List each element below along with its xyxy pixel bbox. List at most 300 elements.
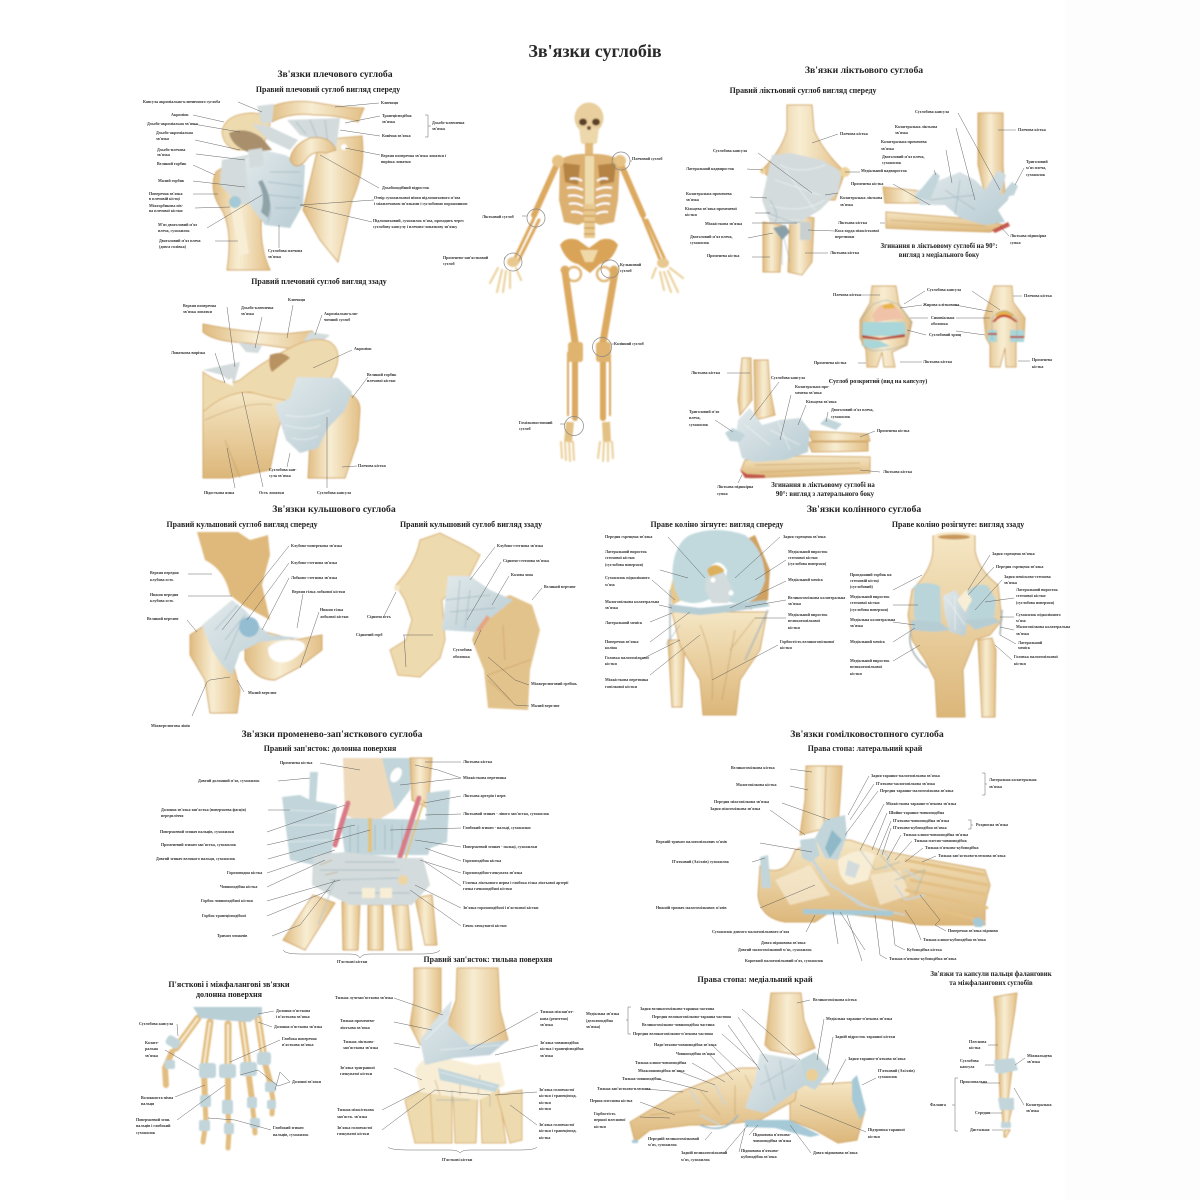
labels and leaders: Тильна лучезап'ясткова зв'язка — [335, 995, 393, 1000]
labels and leaders: клубова ость — [150, 598, 174, 603]
labels and leaders: плечової кістки — [367, 378, 396, 383]
labels and leaders: Задня міжгомілкова зв'язка — [710, 806, 760, 811]
labels and leaders — [156, 759, 569, 964]
labels and leaders: Дзьобо-плечова — [157, 147, 185, 152]
labels and leaders: кістки — [780, 645, 792, 650]
labels and leaders — [814, 287, 1052, 369]
heading: hip joint: Зв'язки кульшового суглоба — [272, 504, 396, 515]
labels and leaders: Колова зона — [511, 572, 533, 577]
labels and leaders: Тильна клино-човноподібна — [635, 1060, 686, 1065]
labels and leaders: (суглобовий) — [850, 584, 874, 589]
labels and leaders: великогомілкової — [788, 618, 821, 623]
illustration: ankle medial — [630, 993, 866, 1143]
labels and leaders: Проксимальна — [960, 1079, 987, 1084]
labels and leaders: Ліктьова кістка — [838, 220, 867, 225]
labels and leaders: Верхня поперечна — [183, 303, 216, 308]
labels and leaders: Латеральний меніск — [605, 620, 643, 625]
illustration: hip front — [190, 532, 322, 713]
labels and leaders: менева зв'язка — [795, 390, 822, 395]
labels and leaders: м'яз, сухожилок — [681, 1157, 711, 1162]
labels and leaders: Надп'ятково-човноподібна зв'язка — [654, 1042, 716, 1047]
labels and leaders: Медіальний надвиросток — [861, 168, 908, 173]
labels and leaders: Медіальна зв'язка — [586, 1011, 619, 1016]
labels and leaders: Міжкісткова перетинка — [463, 775, 506, 780]
labels and leaders — [143, 99, 467, 259]
labels and leaders: Горохоподібна кістка — [463, 858, 501, 863]
labels and leaders: клубова ость — [150, 577, 174, 582]
labels and leaders: пальця — [141, 1101, 155, 1106]
labels and leaders: Медіальний меніск — [788, 577, 824, 582]
labels and leaders: Двоголовий м'яз плеча, — [831, 407, 874, 412]
labels and leaders: Великогомілкова кістка — [813, 997, 857, 1002]
subheading: knee front: Праве коліно зігнуте: вигляд спереду — [651, 520, 784, 529]
labels and leaders: Зв'язка головчастої — [539, 1087, 575, 1092]
labels: Гомілковостопний — [519, 420, 553, 425]
labels and leaders: Тильна клино-човноподібна зв'язка — [903, 832, 968, 837]
illustration: hip back — [390, 533, 540, 710]
labels and leaders: великогомілкової — [850, 664, 883, 669]
labels and leaders: Зв'язка горохоподібної і п'ясткової кістки — [463, 905, 539, 910]
labels and leaders: кістка — [969, 1045, 980, 1050]
labels and leaders: кістки і трапецієпод. — [539, 1093, 576, 1098]
labels and leaders: Горбистість великогомілкової — [780, 639, 835, 644]
labels and leaders: Ость лопатки — [259, 490, 285, 495]
labels and leaders: Колате- — [145, 1040, 160, 1045]
labels and leaders: Великий горбик — [367, 372, 397, 377]
skull — [574, 102, 604, 134]
illustration: opened joint — [860, 286, 1025, 367]
panel: ankle ligaments, lateral view — [656, 729, 1037, 963]
labels and leaders: Сухожилок підколінного — [605, 575, 650, 580]
labels and leaders: Передній великогомілковий — [648, 1136, 700, 1141]
labels and leaders: Сідничо-стегнова зв'язка — [503, 558, 549, 563]
labels and leaders — [335, 995, 584, 1162]
labels and leaders: Горбок трапецієподібної — [202, 913, 247, 918]
labels and leaders: кубоподібна зв'язка — [741, 1154, 777, 1159]
labels and leaders: Трапецієподібна — [382, 113, 412, 118]
labels and leaders: Горбок човноподібної кістки — [201, 898, 253, 903]
labels and leaders: м'яза — [605, 582, 615, 587]
labels and leaders: Капсула акроміально-ключичного суглоба — [143, 99, 220, 104]
labels and leaders: Суглобова капсула — [771, 375, 805, 380]
labels and leaders: Роздвоєна зв'язка — [976, 822, 1008, 827]
labels and leaders: Тильна променево- — [340, 1018, 376, 1023]
panel: wrist, dorsal view — [335, 955, 584, 1162]
labels and leaders: Суглобова — [453, 647, 472, 652]
labels and leaders: Суглобова капсула — [139, 1021, 173, 1026]
labels and leaders: Зв'язка головчастої — [337, 1125, 373, 1130]
labels and leaders: Ключиця — [288, 297, 306, 302]
labels and leaders: в плечовій кістці — [149, 196, 181, 201]
labels and leaders: Долонна п'ясткова зв'язка — [274, 1024, 322, 1029]
labels and leaders: Міжвертлюгова лінія — [151, 723, 191, 728]
labels: Колінний суглоб — [614, 341, 644, 346]
labels and leaders: коліна — [605, 645, 617, 650]
labels and leaders: кістка і трапецієподібна — [540, 1046, 584, 1051]
labels and leaders: Великогомілкова кістка — [731, 765, 775, 770]
labels and leaders: сухожилок — [136, 1130, 156, 1135]
labels and leaders — [850, 551, 1070, 676]
labels and leaders — [356, 543, 578, 708]
labels and leaders: Головка малогомілкової — [1014, 654, 1059, 659]
labels and leaders: Акроміально-клю- — [324, 311, 359, 316]
caption: flexed medial line 2: вигляд з медіального боку — [899, 252, 980, 259]
labels and leaders: Колатеральна — [1026, 1102, 1051, 1107]
labels and leaders: Приєднаний горбик на — [850, 572, 891, 577]
labels and leaders — [838, 109, 1048, 245]
labels and leaders: сухожилок — [1026, 172, 1046, 177]
labels and leaders: Ліктьова кістка — [923, 359, 952, 364]
labels and leaders: Долонна зв'язка зап'ястка (поверхнева фасція) — [161, 807, 247, 812]
labels and leaders: Глибока поперечна — [282, 1036, 317, 1041]
labels and leaders: сухожилок — [878, 1074, 898, 1079]
subheading: dorsal surface: Правий зап'ясток: тильна поверхня — [424, 955, 553, 964]
labels and leaders: П'ятково-кубоподібна зв'язка — [893, 825, 947, 830]
labels and leaders: кістки — [788, 625, 800, 630]
labels and leaders — [147, 543, 349, 728]
labels and leaders: м'яз, сухожилок — [648, 1142, 678, 1147]
labels and leaders: П'ятково-човноподібна зв'язка — [893, 818, 949, 823]
labels and leaders: зв'язка — [850, 623, 863, 628]
illustration: knee back — [908, 532, 1002, 717]
labels and leaders: зв'язка — [1004, 580, 1017, 585]
labels and leaders: вирізка лопатки — [381, 159, 411, 164]
labels and leaders: Ліктьовий згинач - лівого зап'ястка, сухожилок — [463, 811, 550, 816]
labels and leaders: Суглобова капсула — [713, 148, 747, 153]
labels and leaders: Дзьобо-акроміальна — [156, 130, 193, 135]
labels and leaders: Довгий долонний м'яз, сухожилок — [198, 778, 260, 783]
legs — [565, 272, 615, 342]
labels and leaders: Колатеральна ліктьова — [895, 124, 937, 129]
labels and leaders: П'ясткові кістки — [442, 1157, 473, 1162]
panel: hand ligaments — [136, 980, 322, 1148]
labels and leaders: Сухожилок підколінного — [1016, 612, 1061, 617]
labels and leaders: плеча, сухожилок — [158, 228, 190, 233]
labels and leaders: Довгий згинач великого пальця, сухожилок — [156, 856, 236, 861]
labels and leaders: Плечова кістка — [833, 292, 861, 297]
bracket — [952, 1078, 958, 1131]
labels and leaders: зв'язка — [382, 119, 395, 124]
labels and leaders: зв'язка — [1016, 631, 1029, 636]
labels: суглоб — [519, 426, 531, 431]
labels and leaders: Короткий малогомілковий м'яз, сухожилок — [745, 958, 824, 963]
metacarpal brace — [388, 1147, 537, 1153]
labels and leaders: Зв'язка головчастої — [539, 1122, 575, 1127]
labels and leaders: стегнової кістки — [850, 600, 880, 605]
labels and leaders: П'ясткові кістки — [337, 959, 368, 964]
panel: shoulder back view — [171, 277, 397, 495]
labels and leaders: капсула — [960, 1064, 974, 1069]
labels and leaders: Поперечна зв'язка підошви — [948, 928, 999, 933]
labels: Ліктьовий суглоб — [482, 214, 514, 219]
illustration: elbow front — [760, 105, 850, 275]
labels and leaders: Отвір сухожилкової піхви підлопаткового м'яза — [374, 195, 460, 200]
heading: elbow joint: Зв'язки ліктьового суглоба — [805, 65, 923, 76]
labels and leaders: і міжплечовою зв'язками і суглобовою порожниною — [374, 201, 467, 206]
labels and leaders: Малий горбик — [158, 178, 185, 183]
labels and leaders: Підтримка таранної — [868, 1127, 906, 1132]
labels and leaders: гачкуватої кістки — [337, 1131, 370, 1136]
labels and leaders: Колатеральна променева — [686, 191, 732, 196]
subheading: elbow front: Правий ліктьовий суглоб вигляд спереду — [730, 86, 876, 95]
labels and leaders — [605, 534, 845, 689]
labels and leaders: кістки — [685, 212, 697, 217]
labels and leaders: гомілкової кістки — [605, 684, 638, 689]
labels and leaders: гачкуватої кістки — [340, 1071, 373, 1076]
subheading: hip back: Правий кульшовий суглоб вигляд ззаду — [400, 520, 542, 529]
labels and leaders: Латеральний — [1018, 640, 1043, 645]
labels and leaders: Міжкісткова зв'язка — [705, 221, 742, 226]
illustration: elbow medial — [883, 113, 1018, 233]
labels and leaders: зв'язка — [540, 1053, 553, 1058]
labels and leaders: Акроміон — [354, 346, 372, 351]
labels and leaders: Ліктьова підшкірна — [1010, 233, 1046, 238]
labels and leaders: першої плеснової — [594, 1117, 626, 1122]
labels and leaders: Тильна човноподібна — [622, 1076, 661, 1081]
labels and leaders: сухожилок — [690, 240, 710, 245]
labels and leaders: пальців, сухожилок — [273, 1132, 309, 1137]
labels: Плечовий суглоб — [632, 156, 663, 161]
panel: knee back view — [850, 520, 1070, 717]
labels and leaders: Медіальна таранно-п'яткова зв'язка — [826, 1016, 892, 1021]
labels and leaders: Суглобовий хрящ — [929, 332, 962, 337]
labels and leaders: Задня менісково-стегнова — [1004, 574, 1051, 579]
labels and leaders: Задня великогомілково-таранна частина — [640, 1006, 714, 1011]
subheading: lateral border: Права стопа: латеральний край — [808, 744, 923, 753]
labels and leaders: Волокниста піхва — [141, 1095, 173, 1100]
labels and leaders: Долонні зв'язки — [292, 1079, 322, 1084]
panel: wrist ligaments, palmar view — [156, 729, 569, 964]
panel: hip ligaments, front view — [147, 504, 396, 728]
labels and leaders: лобкової кістки — [320, 614, 349, 619]
labels and leaders: Зв'язка човноподібна — [540, 1040, 579, 1045]
labels and leaders: сухожилок — [831, 414, 851, 419]
labels and leaders: зв'язка — [432, 126, 445, 131]
labels and leaders: перетинки — [835, 234, 855, 239]
heading: ankle joint: Зв'язки гомілковостопного суглоба — [790, 729, 944, 740]
labels and leaders: Латеральна колатеральна — [989, 777, 1037, 782]
labels and leaders: Тильна зап'ястково-плеснова — [597, 1086, 651, 1091]
labels and leaders: Жирова клітковина — [923, 302, 959, 307]
labels and leaders: Довгий малогомілковий м'яз, сухожилок — [738, 947, 812, 952]
labels and leaders: Великий горбик — [157, 161, 187, 166]
brace — [626, 1007, 631, 1034]
labels and leaders: Латеральний виросток — [605, 549, 648, 554]
labels and leaders: Долонна п'ясткова — [276, 1008, 310, 1013]
pelvis — [560, 239, 618, 273]
labels and leaders: Довга підошвова зв'язка — [813, 1150, 858, 1155]
illustration: finger — [994, 993, 1018, 1137]
labels and leaders: Верхній тримач малогомілкових м'язів — [656, 839, 728, 844]
labels and leaders: Верхня гілка лобкової кістки — [292, 589, 346, 594]
labels and leaders: зв'язка — [145, 1053, 158, 1058]
labels and leaders: Тримач згиначів — [217, 933, 248, 938]
labels and leaders: Сіднича ость — [367, 614, 392, 619]
labels and leaders: кістка — [539, 1135, 550, 1140]
labels and leaders: (суглобова поверхня) — [788, 561, 827, 566]
labels and leaders: Малогомілкова кістка — [736, 782, 776, 787]
labels and leaders: Тильна плесно-човноподібна — [914, 838, 967, 843]
labels and leaders: Клубово-стегнова зв'язка — [497, 543, 543, 548]
labels and leaders: Човноподібна кістка — [220, 884, 257, 889]
labels and leaders: (довга голівка) — [159, 244, 187, 249]
panel: elbow flexed, lateral view — [689, 358, 912, 498]
labels and leaders: зв'язка — [241, 311, 254, 316]
labels and leaders: м'яза — [1016, 618, 1026, 623]
labels and leaders: Міжкісткова таранно-п'яткова зв'язка — [886, 801, 956, 806]
labels and leaders: Променева — [1032, 357, 1052, 362]
labels and leaders: зв'язка лопатки — [183, 309, 213, 314]
labels and leaders: чичний суглоб — [324, 317, 350, 322]
labels and leaders: Плечова кістка — [840, 131, 868, 136]
labels and leaders: Міжпальцева — [1027, 1053, 1052, 1058]
labels and leaders: зв'язка — [895, 130, 908, 135]
labels and leaders: стегнової кістки — [1016, 593, 1046, 598]
subheading: back view: Правий плечовий суглоб вигляд ззаду — [251, 277, 387, 286]
labels and leaders: Глибокий згинач - пальці, сухожилки — [463, 825, 531, 830]
labels and leaders: Променевий згинач зап'ястка, сухожилок — [161, 842, 237, 847]
labels and leaders: Малий вертлюг — [531, 703, 560, 708]
labels and leaders: зв'язка — [540, 1022, 553, 1027]
joint locator circles — [504, 152, 630, 436]
heading: wrist joint: Зв'язки променево-зап'ясткового суглоба — [242, 729, 423, 740]
labels and leaders: Ліктьова кістка — [883, 469, 912, 474]
labels and leaders: і п'ясткова зв'язка — [276, 1014, 310, 1019]
labels and leaders: Зв'язка тригранної — [340, 1065, 376, 1070]
panel: ankle ligaments, medial view — [586, 975, 915, 1162]
labels and leaders: Великий вертлюг — [147, 616, 179, 621]
panel: shoulder ligaments, front view — [143, 69, 467, 270]
braces — [968, 773, 987, 829]
labels and leaders: Променева кістка — [280, 760, 312, 765]
labels and leaders: Підостьова ямка — [204, 490, 234, 495]
labels and leaders: Дзьобоподібний відросток — [382, 185, 430, 190]
rib cage — [559, 154, 620, 225]
labels and leaders: сумка — [717, 491, 728, 496]
labels and leaders: Підлопатковий, сухожилок м'яза, проходить через — [373, 218, 464, 223]
labels and leaders: Задня схрещена зв'язка — [992, 551, 1035, 556]
labels and leaders: Суглобова капсула — [915, 109, 949, 114]
labels and leaders: Ліктьова артерія і нерв — [463, 793, 506, 798]
labels and leaders: Глибокий згинач — [273, 1125, 304, 1130]
labels and leaders: Клубово-поперекова зв'язка — [291, 543, 342, 548]
labels and leaders: Фаланга — [930, 1102, 946, 1107]
labels and leaders: Задня таранно-п'яткова зв'язка — [848, 1056, 906, 1061]
labels and leaders: Перша плеснова кістка — [590, 1098, 632, 1103]
arms — [534, 162, 643, 215]
labels and leaders: Ліктьова підшкірна — [717, 484, 753, 489]
labels and leaders: Передня великогомілково-п'яткова частина — [633, 1031, 713, 1036]
labels and leaders: Колатеральна про- — [795, 384, 830, 389]
labels and leaders: Сухожилок довгого малогомілкового м'яза — [712, 929, 789, 934]
labels and leaders: кістки — [850, 671, 862, 676]
labels and leaders: сумка — [1010, 240, 1021, 245]
labels and leaders: зв'язка — [1027, 1059, 1040, 1064]
labels and leaders: Медіальний виросток — [788, 612, 828, 617]
labels and leaders: Горохоподібно-гачкувата зв'язка — [463, 870, 522, 875]
heading: finger line 1: Зв'язки та капсули пальця фаланговик — [930, 971, 1052, 978]
labels and leaders: Головка малогомілкової — [605, 655, 650, 660]
feet and hands — [568, 422, 607, 442]
illustration: hand — [164, 1007, 276, 1148]
labels and leaders: човноподібна зв'язка — [753, 1138, 791, 1143]
labels and leaders: Ключиця — [381, 100, 399, 105]
labels and leaders: Колатеральна променева — [881, 139, 927, 144]
labels and leaders: Ліктьова кістка — [463, 759, 492, 764]
labels and leaders: Малий вертлюг — [248, 690, 277, 695]
labels and leaders: кістки — [594, 1124, 606, 1129]
labels and leaders: кістки — [539, 1106, 551, 1111]
labels and leaders: Суглобова плечова — [268, 248, 302, 253]
labels and leaders: сухожилок — [882, 160, 902, 165]
labels and leaders: Конічна зв'язка — [382, 133, 411, 138]
labels and leaders: Шийно-таранно-човноподібна — [889, 810, 944, 815]
labels and leaders: Латеральний надвиросток — [686, 166, 735, 171]
heading: knee joint: Зв'язки колінного суглоба — [807, 504, 921, 515]
labels and leaders: Нижній тримач малогомілкових м'язів — [656, 905, 727, 910]
labels and leaders: Суглобова капсула — [317, 490, 351, 495]
labels and leaders: Середня — [975, 1110, 991, 1115]
labels and leaders: Задня таранно-малогомілкова зв'язка — [871, 773, 940, 778]
labels and leaders: Підошвова п'ятково- — [741, 1148, 780, 1153]
labels and leaders: Акроміон — [171, 112, 189, 117]
labels and leaders: Променева кістка — [877, 428, 909, 433]
labels and leaders: Поперечна зв'язка — [605, 639, 639, 644]
labels and leaders: Передня великогомілково-таранна частина — [652, 1014, 731, 1019]
labels and leaders: Малогомілкова колатеральна — [605, 599, 659, 604]
panel: knee ligaments, front view — [605, 504, 921, 715]
labels and leaders: Поперечна зв'язка — [149, 191, 183, 196]
spine — [584, 204, 595, 238]
labels and leaders: (дельтоподібна — [586, 1018, 613, 1023]
labels and leaders: сухожилок — [689, 422, 709, 427]
labels and leaders — [136, 1008, 322, 1137]
heading: metacarpal ligaments line 2: долонна поверхня — [196, 990, 263, 999]
labels and leaders — [685, 131, 908, 258]
labels and leaders: зап'ясткова зв'язка — [343, 1045, 378, 1050]
labels and leaders: Передня схрещена зв'язка — [605, 534, 652, 539]
labels and leaders: зв'язка — [156, 136, 169, 141]
labels: Променево-зап'ястковий — [443, 255, 489, 260]
labels and leaders: Нижня гілка — [320, 607, 343, 612]
labels and leaders: П'ятковий (Ахіллів) сухожилок — [672, 859, 730, 864]
labels and leaders: Суглобова кап- — [269, 467, 297, 472]
labels and leaders: Великий вертлюг — [544, 584, 576, 589]
labels and leaders: зв'язка — [788, 601, 801, 606]
labels and leaders: Тильна зап'ястково-плеснова зв'язка — [938, 853, 1005, 858]
subheading: front view: Правий плечовий суглоб вигляд спереду — [256, 85, 400, 94]
labels and leaders: Латеральний виросток — [1016, 587, 1059, 592]
labels and leaders: Поверхневий згинач - пальці, сухожилки — [463, 844, 538, 849]
labels and leaders — [689, 370, 912, 496]
labels and leaders: передпліччя — [161, 813, 184, 818]
subheading: palmar surface: Правий зап'ясток: долонна поверхня — [264, 744, 397, 753]
labels and leaders: стегновій кістці — [850, 578, 880, 583]
labels and leaders: зв'язка — [989, 784, 1002, 789]
labels and leaders: Медіальний виросток — [788, 549, 828, 554]
illustration: knee front — [666, 530, 770, 715]
labels and leaders: ліктьова зв'язка — [340, 1025, 370, 1030]
labels and leaders: П'ятково-малогомілкова зв'язка — [876, 781, 935, 786]
labels and leaders: стегнової кістки — [788, 555, 818, 560]
labels and leaders: ральна — [145, 1046, 158, 1051]
labels and leaders — [656, 765, 1037, 963]
labels and leaders: Човноподібна зв'язка — [676, 1051, 715, 1056]
labels and leaders: Триголовий — [1026, 159, 1048, 164]
labels and leaders: кістки — [1014, 661, 1026, 666]
caption: flexed lateral line 2: 90°: вигляд з латерального боку — [776, 491, 875, 498]
labels and leaders: кістки — [605, 661, 617, 666]
